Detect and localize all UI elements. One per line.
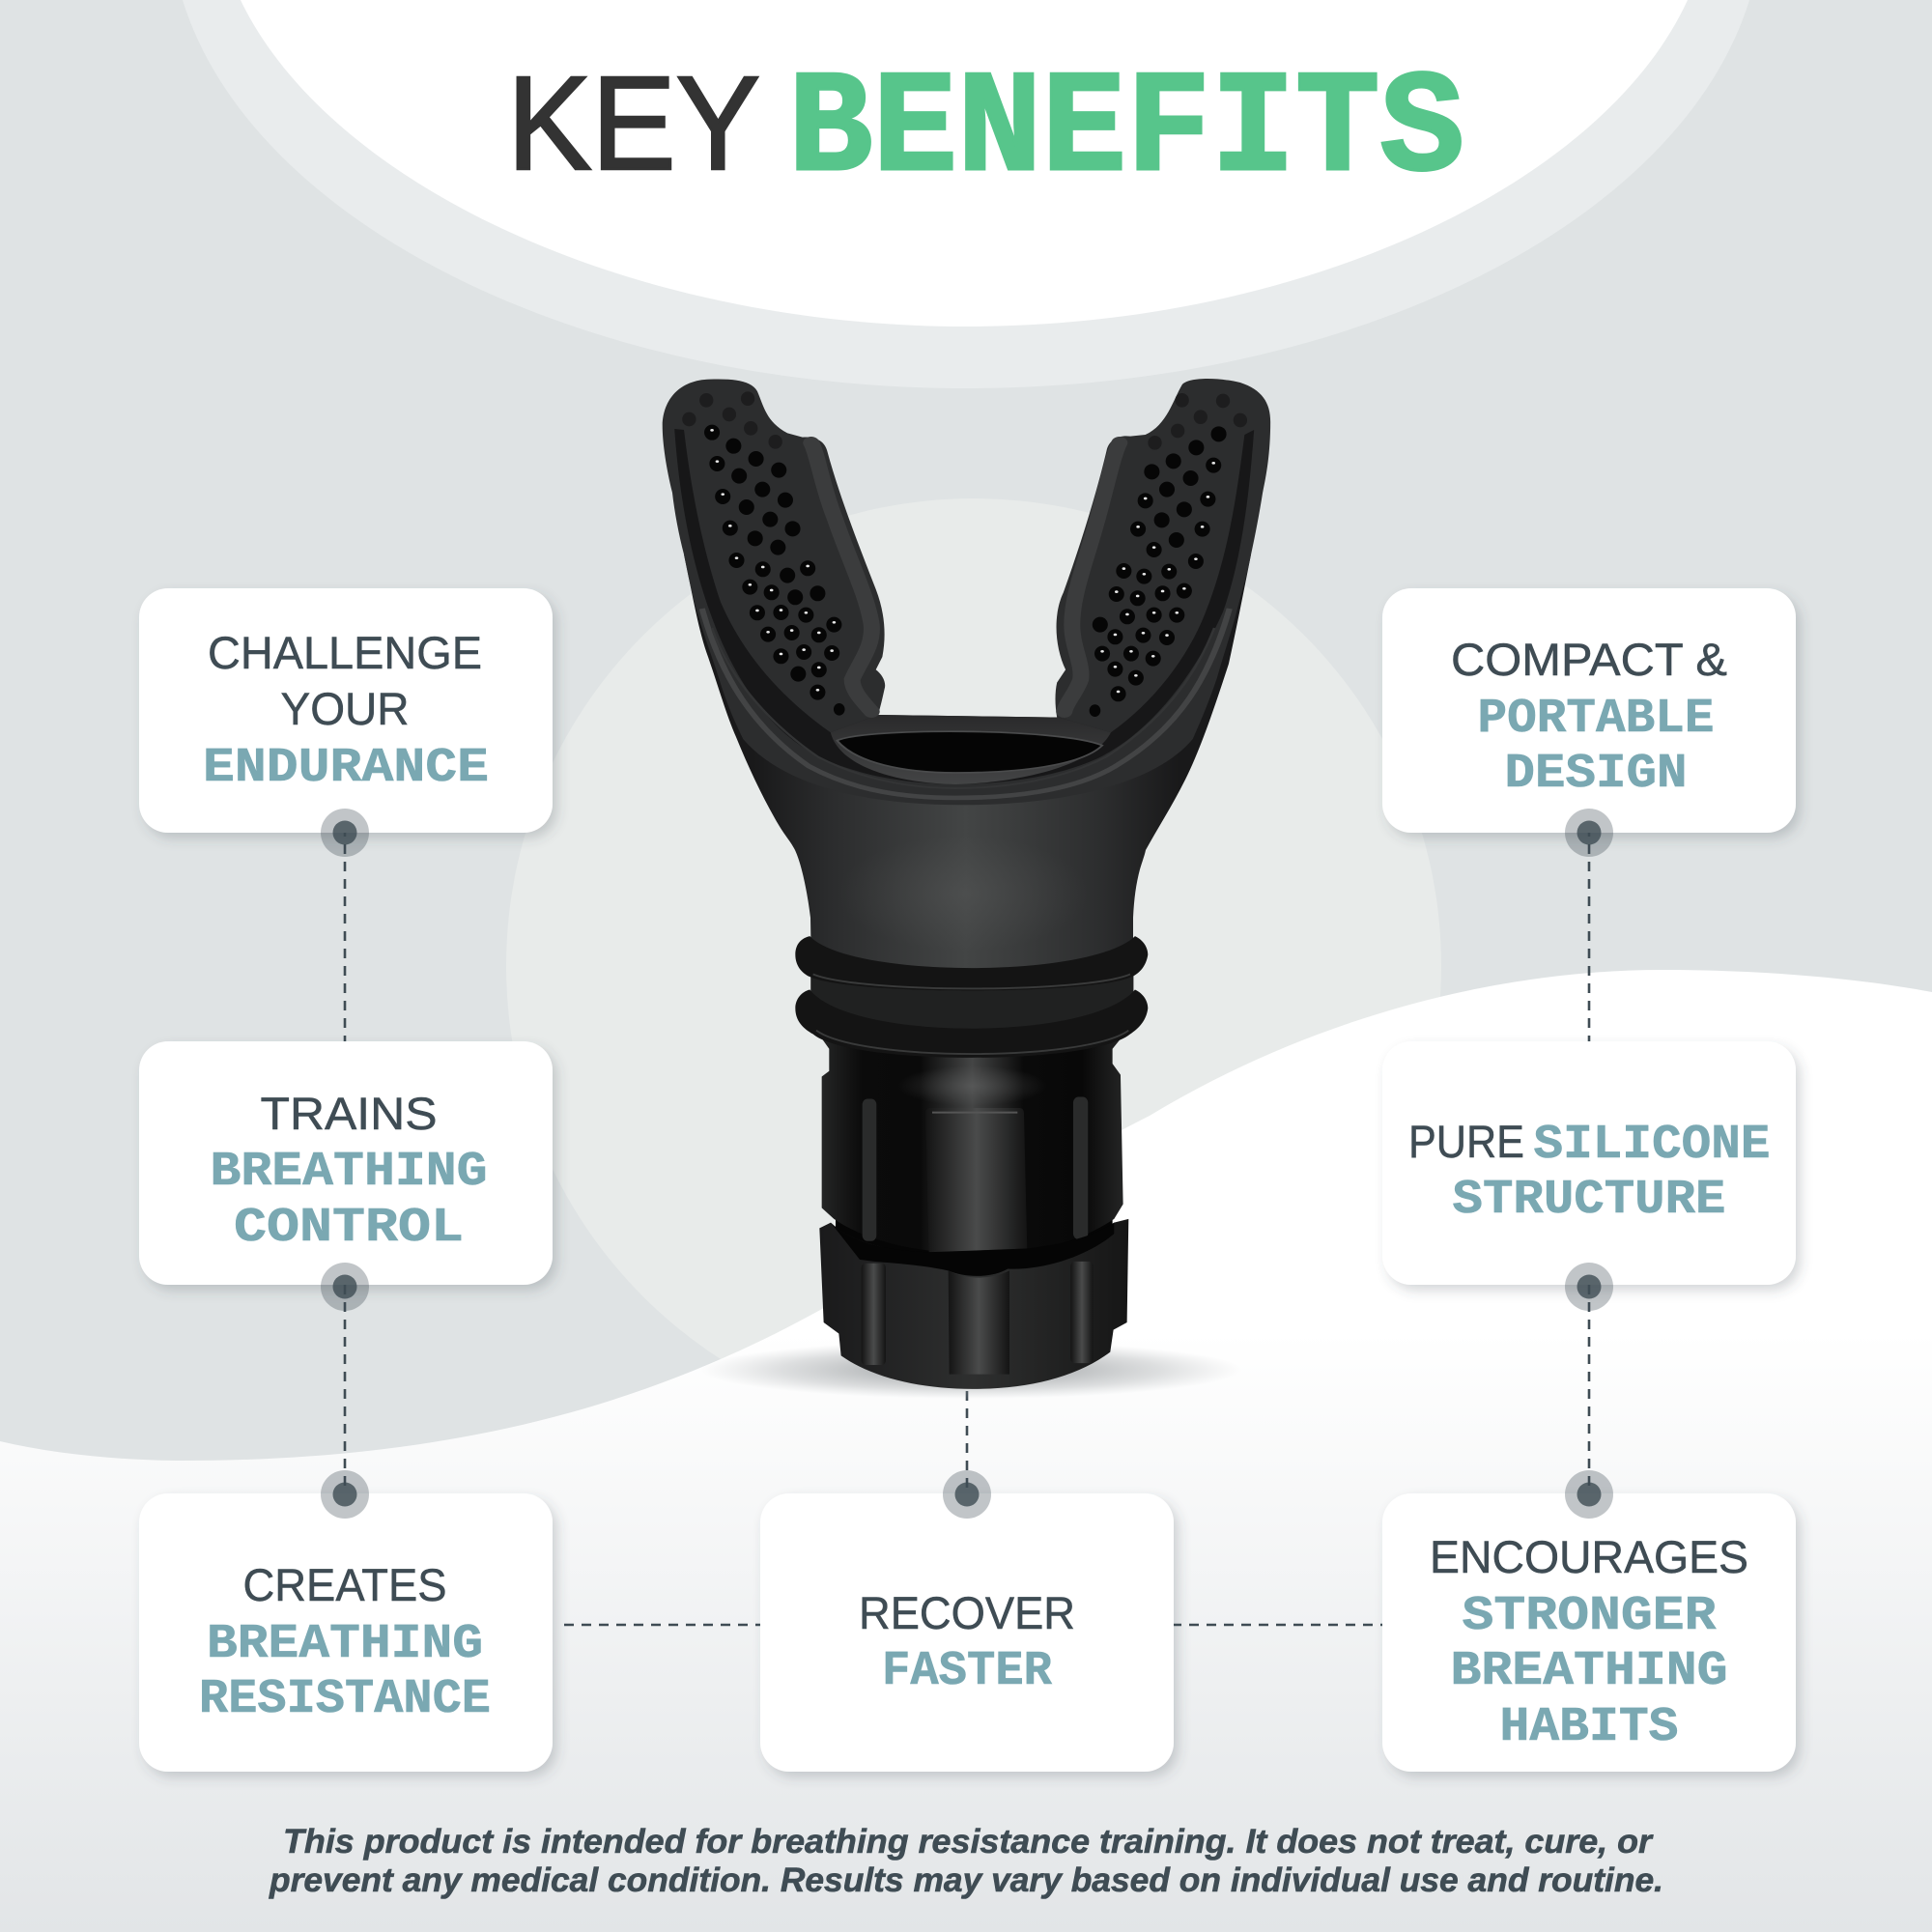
air hole	[838, 731, 1102, 773]
top outer arc	[183, 0, 1749, 388]
card: encourages stronger breathing habits: HABITS	[1499, 1700, 1679, 1755]
card: creates breathing resistance	[139, 1493, 553, 1772]
card: compact and portable design: COMPACT &	[1451, 634, 1727, 685]
card: trains breathing control: TRAINS	[261, 1088, 437, 1139]
cap tabs	[862, 1264, 886, 1365]
top white arc	[241, 0, 1688, 327]
title	[507, 49, 1464, 213]
neck highlight	[838, 836, 1089, 952]
card: trains breathing control	[139, 1041, 553, 1285]
card: pure silicone structure: SILICONE	[1534, 1118, 1770, 1173]
collar ribs	[863, 1098, 876, 1241]
card: challenge your endurance: CHALLENGE	[208, 627, 482, 678]
card: creates breathing resistance: CREATES	[243, 1559, 446, 1610]
card: pure silicone structure: PURE	[1408, 1116, 1524, 1167]
neck body	[684, 554, 1251, 978]
card: challenge your endurance	[139, 588, 553, 833]
card: challenge your endurance: YOUR	[280, 683, 410, 734]
disclaimer	[269, 1823, 1663, 1899]
connector dots	[321, 809, 1613, 1519]
card: trains breathing control: BREATHING	[211, 1145, 487, 1200]
title: BENEFITS	[788, 49, 1464, 213]
ring one	[795, 936, 1148, 991]
card: recover faster: FASTER	[882, 1644, 1052, 1699]
bump highlights	[712, 430, 1213, 692]
locking cap	[819, 1219, 1128, 1389]
card: pure silicone structure: STRUCTURE	[1453, 1173, 1725, 1228]
product shadow	[700, 1341, 1241, 1399]
disclaimer: This product is intended for breathing resistance training. It does not treat, cure, or	[283, 1823, 1654, 1861]
card: creates breathing resistance: RESISTANCE	[199, 1672, 491, 1727]
card: challenge your endurance: ENDURANCE	[203, 741, 489, 796]
card: encourages stronger breathing habits: BREATHING	[1451, 1644, 1727, 1699]
centre tab	[925, 1108, 1027, 1252]
product: breathing trainer	[663, 379, 1270, 1389]
card: encourages stronger breathing habits: ENCOURAGES	[1430, 1531, 1748, 1582]
base: rings and collar	[795, 936, 1148, 1389]
disclaimer: prevent any medical condition. Results may vary based on individual use and routine.	[269, 1861, 1663, 1899]
grip bumps	[682, 391, 1247, 717]
card: compact and portable design: DESIGN	[1505, 747, 1687, 802]
teeth ridges	[811, 442, 871, 712]
title: KEY	[507, 49, 760, 198]
bottom white wave	[0, 970, 1932, 1932]
card: recover faster: RECOVER	[859, 1587, 1075, 1638]
card: creates breathing resistance: BREATHING	[207, 1617, 483, 1672]
centre circle	[506, 498, 1441, 1434]
card: recover faster	[760, 1493, 1174, 1772]
card: compact and portable design	[1382, 588, 1796, 833]
card: compact and portable design: PORTABLE	[1478, 692, 1714, 747]
card: pure silicone structure	[1382, 1041, 1796, 1285]
connector lines	[345, 827, 1589, 1625]
card: encourages stronger breathing habits: STRONGER	[1463, 1589, 1716, 1644]
mouthpiece	[663, 379, 1270, 805]
card: encourages stronger breathing habits	[1382, 1493, 1796, 1772]
ring two	[795, 990, 1148, 1058]
card: trains breathing control: CONTROL	[234, 1201, 464, 1256]
